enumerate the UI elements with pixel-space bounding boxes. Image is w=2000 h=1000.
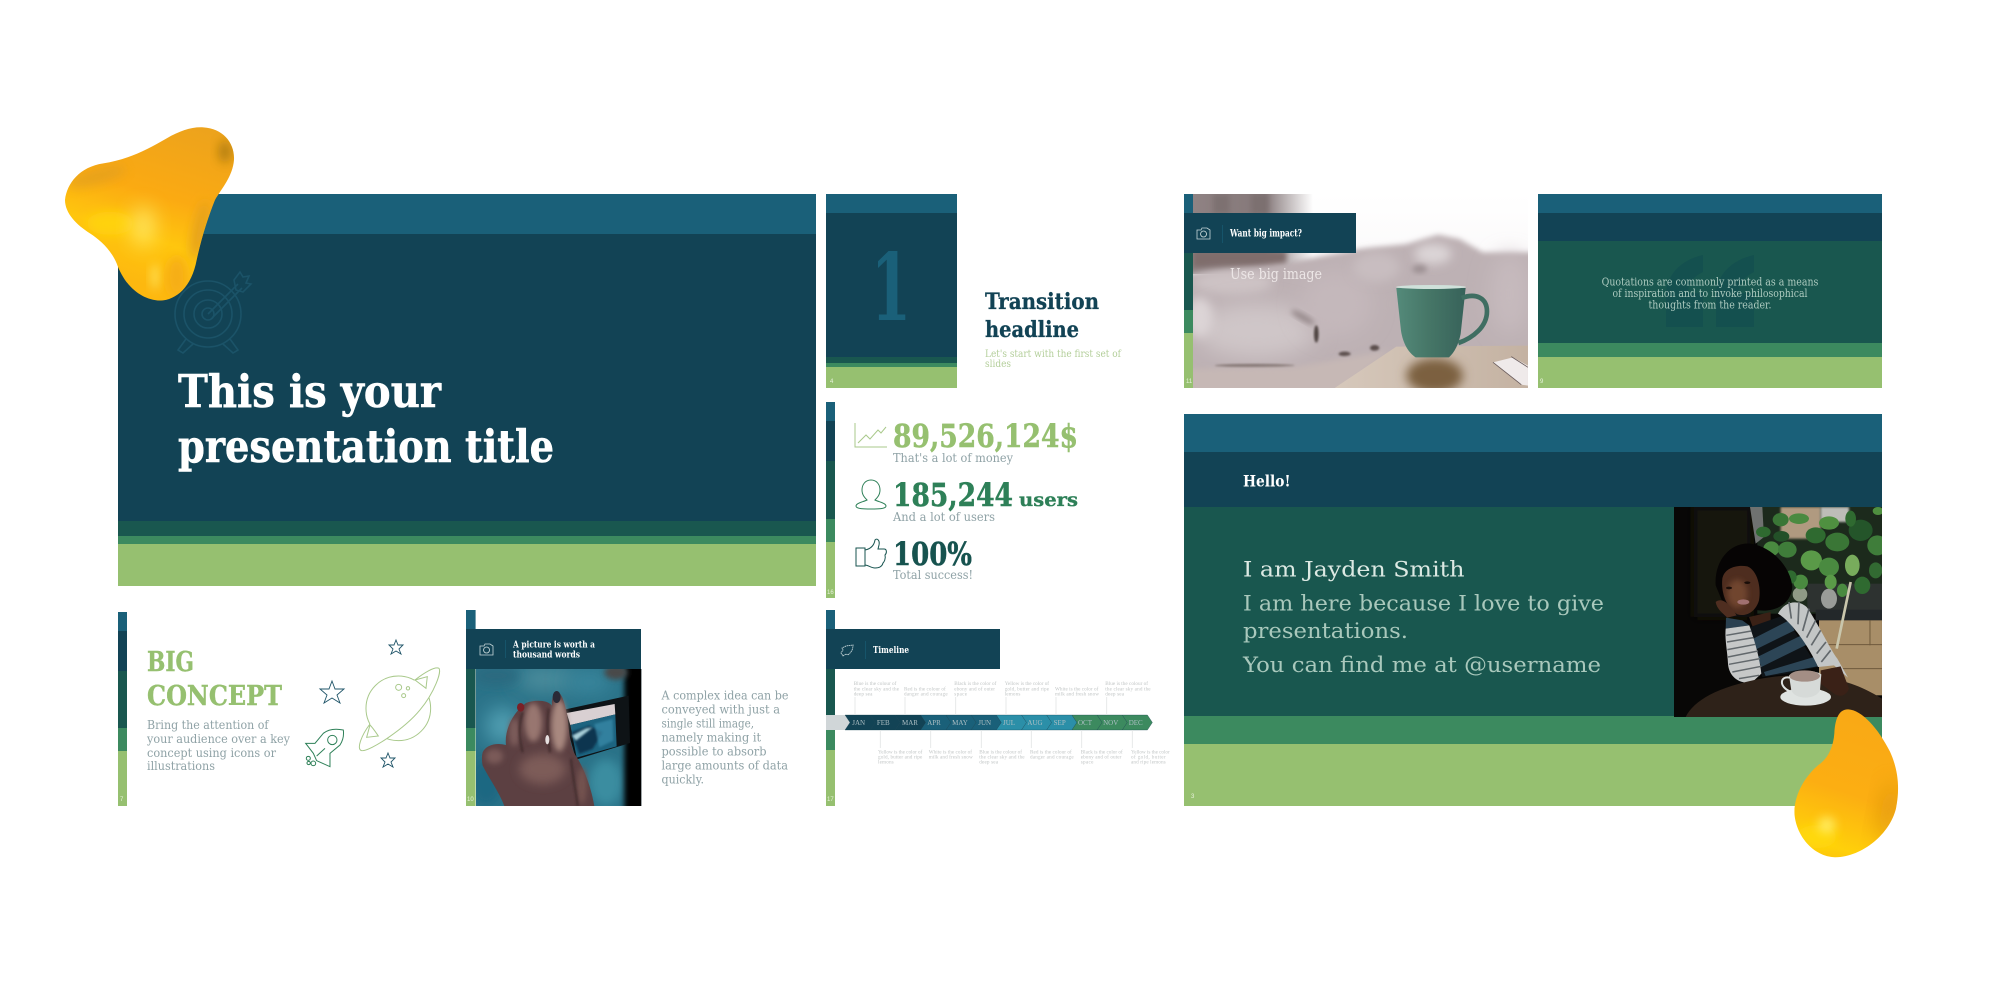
- timeline notes above: White is the color of: [1055, 685, 1099, 692]
- subheading: Let's start with the first set of: [985, 349, 1122, 360]
- intro text: I am here because I love to give: [1243, 592, 1604, 617]
- intro text: [1242, 558, 1604, 678]
- photo: hand holding phone: [476, 669, 642, 806]
- stat: users: [892, 476, 1078, 524]
- stat: success: Total success!: [893, 568, 973, 582]
- timeline notes above: danger and courage: [904, 692, 948, 698]
- chart: month arrow timeline: MAR: [902, 719, 918, 727]
- body text: [661, 688, 788, 786]
- intro text: presentations.: [1243, 619, 1408, 644]
- header text: [512, 640, 595, 661]
- timeline notes below: Black is the color of: [1081, 748, 1123, 755]
- stat: success: [893, 535, 973, 582]
- chart: month arrow timeline: NOV: [1103, 719, 1118, 727]
- chart: month arrow timeline: MAY: [952, 719, 968, 727]
- timeline notes below: Red is the colour of: [1030, 748, 1072, 755]
- timeline notes below: and ripe lemons: [1131, 760, 1166, 766]
- caption: Use big image: [1230, 267, 1322, 283]
- panel: hello slide: [1184, 414, 1887, 806]
- heading: transition headline: Transition: [985, 289, 1099, 315]
- body text: illustrations: [147, 759, 215, 773]
- timeline notes below: Yellow is the color: [1131, 749, 1170, 755]
- section number: 1: [871, 233, 911, 342]
- timeline notes below: [878, 748, 1170, 766]
- body text: [146, 718, 290, 773]
- title: This is your: [178, 365, 442, 418]
- heading: transition headline: headline: [985, 317, 1079, 343]
- phone: [566, 696, 630, 759]
- timeline notes above: ebony and of outer: [954, 685, 995, 692]
- panel: stats slide: [826, 402, 1078, 598]
- stat: money: That's a lot of money: [893, 451, 1013, 465]
- panel: picture slide: [466, 610, 788, 816]
- timeline notes below: lemons: [878, 760, 894, 766]
- icon: quotation mark: [1666, 255, 1754, 327]
- chart: month arrow timeline: DEC: [1129, 719, 1143, 727]
- icon: line chart: [855, 423, 887, 447]
- page number: 4: [830, 379, 834, 385]
- face: [1722, 566, 1760, 615]
- header text: A picture is worth a: [512, 640, 595, 650]
- header band: [466, 629, 641, 669]
- intro text: I am Jayden Smith: [1243, 558, 1465, 583]
- hand on cup: [1821, 666, 1849, 696]
- icon: rocket: [306, 729, 344, 767]
- timeline notes below: Blue is the colour of: [979, 748, 1022, 755]
- timeline notes above: gold, butter and ripe: [1005, 686, 1050, 692]
- icon: rocket small: [841, 645, 853, 656]
- decorative yellow blob top left: [65, 127, 234, 301]
- stat: users: And a lot of users: [892, 510, 995, 524]
- timeline notes above: [854, 680, 1151, 698]
- chart: month arrow timeline: AUG: [1027, 719, 1043, 727]
- page number: 16: [827, 590, 834, 596]
- chart: month arrow timeline: JUN: [978, 719, 991, 727]
- page number: 7: [120, 797, 124, 803]
- intro text: You can find me at @username: [1242, 653, 1601, 678]
- body text: namely making it: [662, 730, 761, 744]
- hand: [482, 692, 594, 806]
- subheading: [985, 349, 1122, 370]
- timeline notes above: the clear sky and the: [1105, 686, 1151, 692]
- chart: month arrow timeline: SEP: [1054, 719, 1066, 727]
- panel: timeline slide: [826, 610, 1170, 806]
- body text: quickly.: [662, 772, 704, 786]
- timeline notes below: gold, butter and ripe: [878, 754, 923, 760]
- header band: [826, 629, 1000, 669]
- table: [1335, 346, 1528, 388]
- chart: month arrow timeline: JUL: [1003, 719, 1015, 727]
- page number: 11: [1186, 379, 1193, 385]
- icon: target with arrow: [175, 272, 251, 353]
- body text: single still image,: [662, 716, 754, 730]
- photo: woman with coffee: [1674, 507, 1887, 717]
- heading: hello: Hello!: [1243, 472, 1290, 491]
- icon: camera: [480, 644, 493, 655]
- body text: your audience over a key: [146, 732, 290, 746]
- body text: conveyed with just a: [662, 702, 780, 716]
- timeline notes above: the clear sky and the: [854, 686, 900, 692]
- icon: camera: [1197, 228, 1210, 239]
- page number: 10: [467, 797, 474, 803]
- timeline notes above: Blue is the colour of: [854, 680, 897, 687]
- heading: big concept: BIG: [147, 646, 194, 678]
- title: presentation title: [178, 420, 554, 473]
- chart: month arrow timeline: OCT: [1078, 719, 1093, 727]
- page number: 17: [827, 797, 834, 803]
- table: [1686, 675, 1882, 717]
- timeline ticks: [855, 697, 1132, 748]
- quote text: of inspiration and to invoke philosophical: [1612, 287, 1808, 300]
- timeline notes above: lemons: [1005, 692, 1020, 698]
- timeline notes above: deep sea: [854, 692, 873, 698]
- quote text: thoughts from the reader.: [1648, 299, 1772, 312]
- header text: Want big impact?: [1229, 229, 1302, 240]
- header band: [1184, 213, 1356, 253]
- timeline notes above: Red is the colour of: [904, 685, 946, 692]
- chart: month arrow timeline: JAN: [852, 719, 865, 727]
- timeline notes below: deep sea: [979, 760, 999, 766]
- body text: possible to absorb: [662, 744, 767, 758]
- timeline notes above: space: [954, 692, 968, 698]
- icon: thumbs up: [856, 539, 886, 568]
- timeline notes below: the clear sky and the: [979, 754, 1025, 760]
- stat: money: [893, 417, 1078, 465]
- page number: 3: [1191, 794, 1195, 800]
- timeline notes below: Yellow is the color of: [878, 748, 923, 755]
- timeline notes below: ebony and of outer: [1081, 754, 1122, 760]
- stat: money: 89,526,124$: [893, 417, 1078, 455]
- decorative yellow blob bottom right: [1794, 709, 1898, 858]
- timeline notes below: White is the color of: [929, 748, 972, 755]
- quote text: [1602, 275, 1818, 312]
- stat: users: users: [1019, 489, 1078, 511]
- body text: Bring the attention of: [147, 718, 270, 732]
- chart: month arrow timeline: FEB: [877, 719, 890, 727]
- subheading: slides: [985, 359, 1011, 370]
- chart: month arrow timeline: APR: [927, 719, 941, 727]
- icon: ringed planet: [359, 668, 440, 751]
- mug: [1396, 288, 1466, 357]
- timeline notes above: Blue is the colour of: [1105, 680, 1148, 687]
- body text: large amounts of data: [662, 758, 788, 772]
- timeline notes above: milk and fresh snow: [1055, 690, 1099, 698]
- body text: concept using icons or: [147, 746, 276, 760]
- timeline notes above: deep sea: [1105, 692, 1125, 698]
- chart: month arrow timeline: [826, 715, 1152, 730]
- photo: mug on table: [1186, 194, 1536, 394]
- page number: 9: [1540, 379, 1544, 385]
- stat: users: 185,244: [893, 476, 1013, 514]
- coffee cup: [1780, 688, 1831, 706]
- timeline notes above: Black is the color of: [954, 680, 997, 687]
- plant leaves: [1756, 507, 1887, 597]
- icon: user: [856, 480, 886, 509]
- timeline notes below: of gold, butter: [1131, 754, 1166, 760]
- hair: [1716, 544, 1792, 611]
- icon: stars: [320, 640, 403, 767]
- panel: big image slide: [1184, 194, 1536, 394]
- timeline notes below: danger and courage: [1030, 754, 1074, 760]
- heading: big concept: CONCEPT: [147, 680, 282, 712]
- heading: transition headline: [985, 289, 1099, 343]
- sleeve left: [1726, 618, 1749, 629]
- stat: success: 100%: [893, 535, 972, 573]
- shirt: [1746, 615, 1818, 677]
- body text: A complex idea can be: [661, 688, 788, 702]
- timeline notes above: Yellow is the color of: [1005, 680, 1049, 687]
- panel: big concept slide: [118, 612, 440, 806]
- title: [178, 365, 554, 473]
- panel: title slide: [118, 194, 816, 586]
- quote text: Quotations are commonly printed as a means: [1602, 275, 1818, 288]
- sleeve right: [1778, 602, 1848, 678]
- panel: quote slide: [1538, 194, 1882, 388]
- header text: Timeline: [873, 645, 909, 656]
- header text: thousand words: [513, 650, 580, 661]
- heading: big concept: [147, 646, 282, 712]
- timeline notes below: milk and fresh snow: [929, 754, 973, 760]
- panel: transition slide: [826, 194, 1122, 388]
- timeline notes below: space: [1081, 760, 1094, 766]
